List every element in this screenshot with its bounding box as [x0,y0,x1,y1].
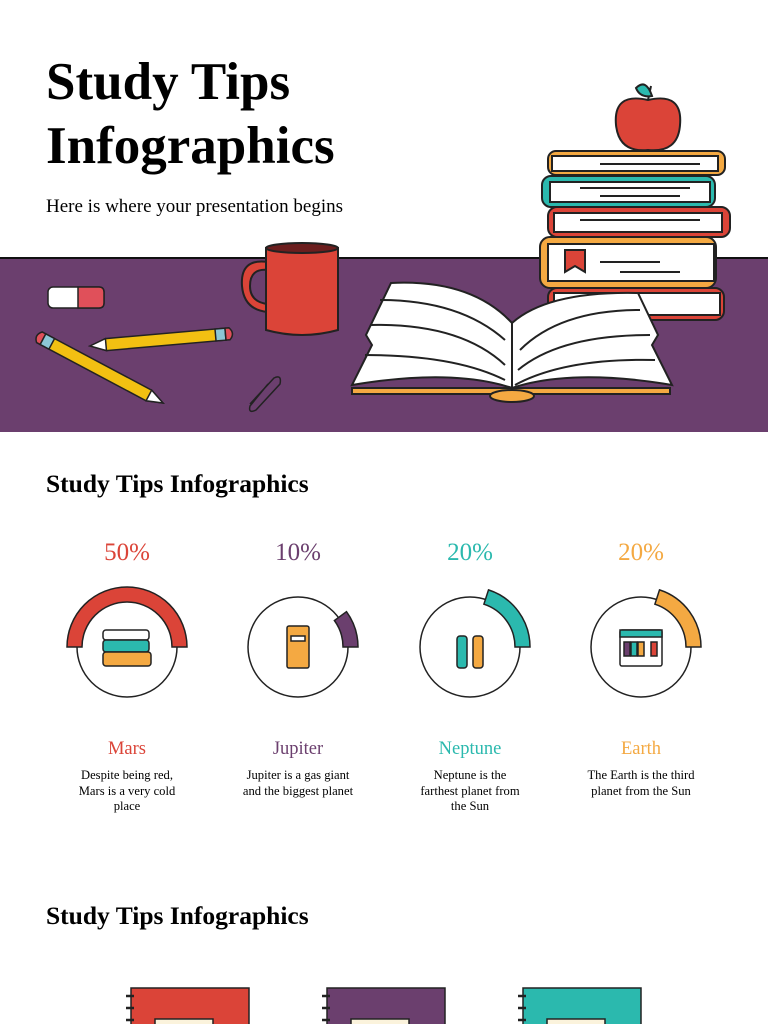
icon: apple [616,84,680,150]
text: Neptune: Neptune [439,739,501,759]
icon: pencil 2 [34,331,166,408]
text: Earth: The Earth is the third [587,768,695,782]
text: Mars: place [114,799,140,813]
text: Jupiter: and the biggest planet [243,784,353,798]
charts: donut gauges [66,586,702,698]
heading: section 2: Study Tips Infographics [46,901,309,930]
heading: section 1: Study Tips Infographics [46,469,309,498]
gauge: Neptune [420,590,530,697]
title: Infographics [46,117,335,175]
subtitle: Here is where your presentation begins [46,196,343,217]
text: Mars: Mars is a very cold [79,784,175,798]
notebook: teal [518,988,641,1024]
text: Earth [587,739,695,798]
percent: Mars: 50% [104,539,150,566]
desk illustration [0,83,768,432]
percent: Jupiter: 10% [275,539,321,566]
text: Jupiter: Jupiter is a gas giant [247,768,349,782]
percent: Neptune: 20% [447,539,493,566]
title [46,53,335,175]
text: Mars [79,739,176,813]
gauge: Earth [591,590,701,697]
text: Mars: Despite being red, [81,768,173,782]
text: Neptune: farthest planet from [420,784,520,798]
gauge: Mars [67,587,187,697]
text: Earth: Earth [621,739,661,759]
icon: open book [352,283,672,402]
gauge: Jupiter [248,597,358,697]
desk band [0,258,768,432]
icon: book stack [540,151,730,320]
text: Neptune [420,739,520,813]
notebook: red [126,988,249,1024]
icon: pencil 1 [89,328,233,352]
text: Neptune: the Sun [451,799,489,813]
icon: mug [242,243,338,335]
text: Earth: planet from the Sun [591,784,691,798]
text: Jupiter [243,739,354,798]
icon: eraser [48,287,104,308]
notebooks [126,987,642,1024]
title: Study Tips [46,53,290,111]
text: Jupiter: Jupiter [273,739,323,759]
icon: paperclip [250,377,280,411]
text: Mars: Mars [108,739,146,759]
notebook: purple [322,988,445,1024]
text: Neptune: Neptune is the [434,768,506,782]
percent: Earth: 20% [618,539,664,566]
